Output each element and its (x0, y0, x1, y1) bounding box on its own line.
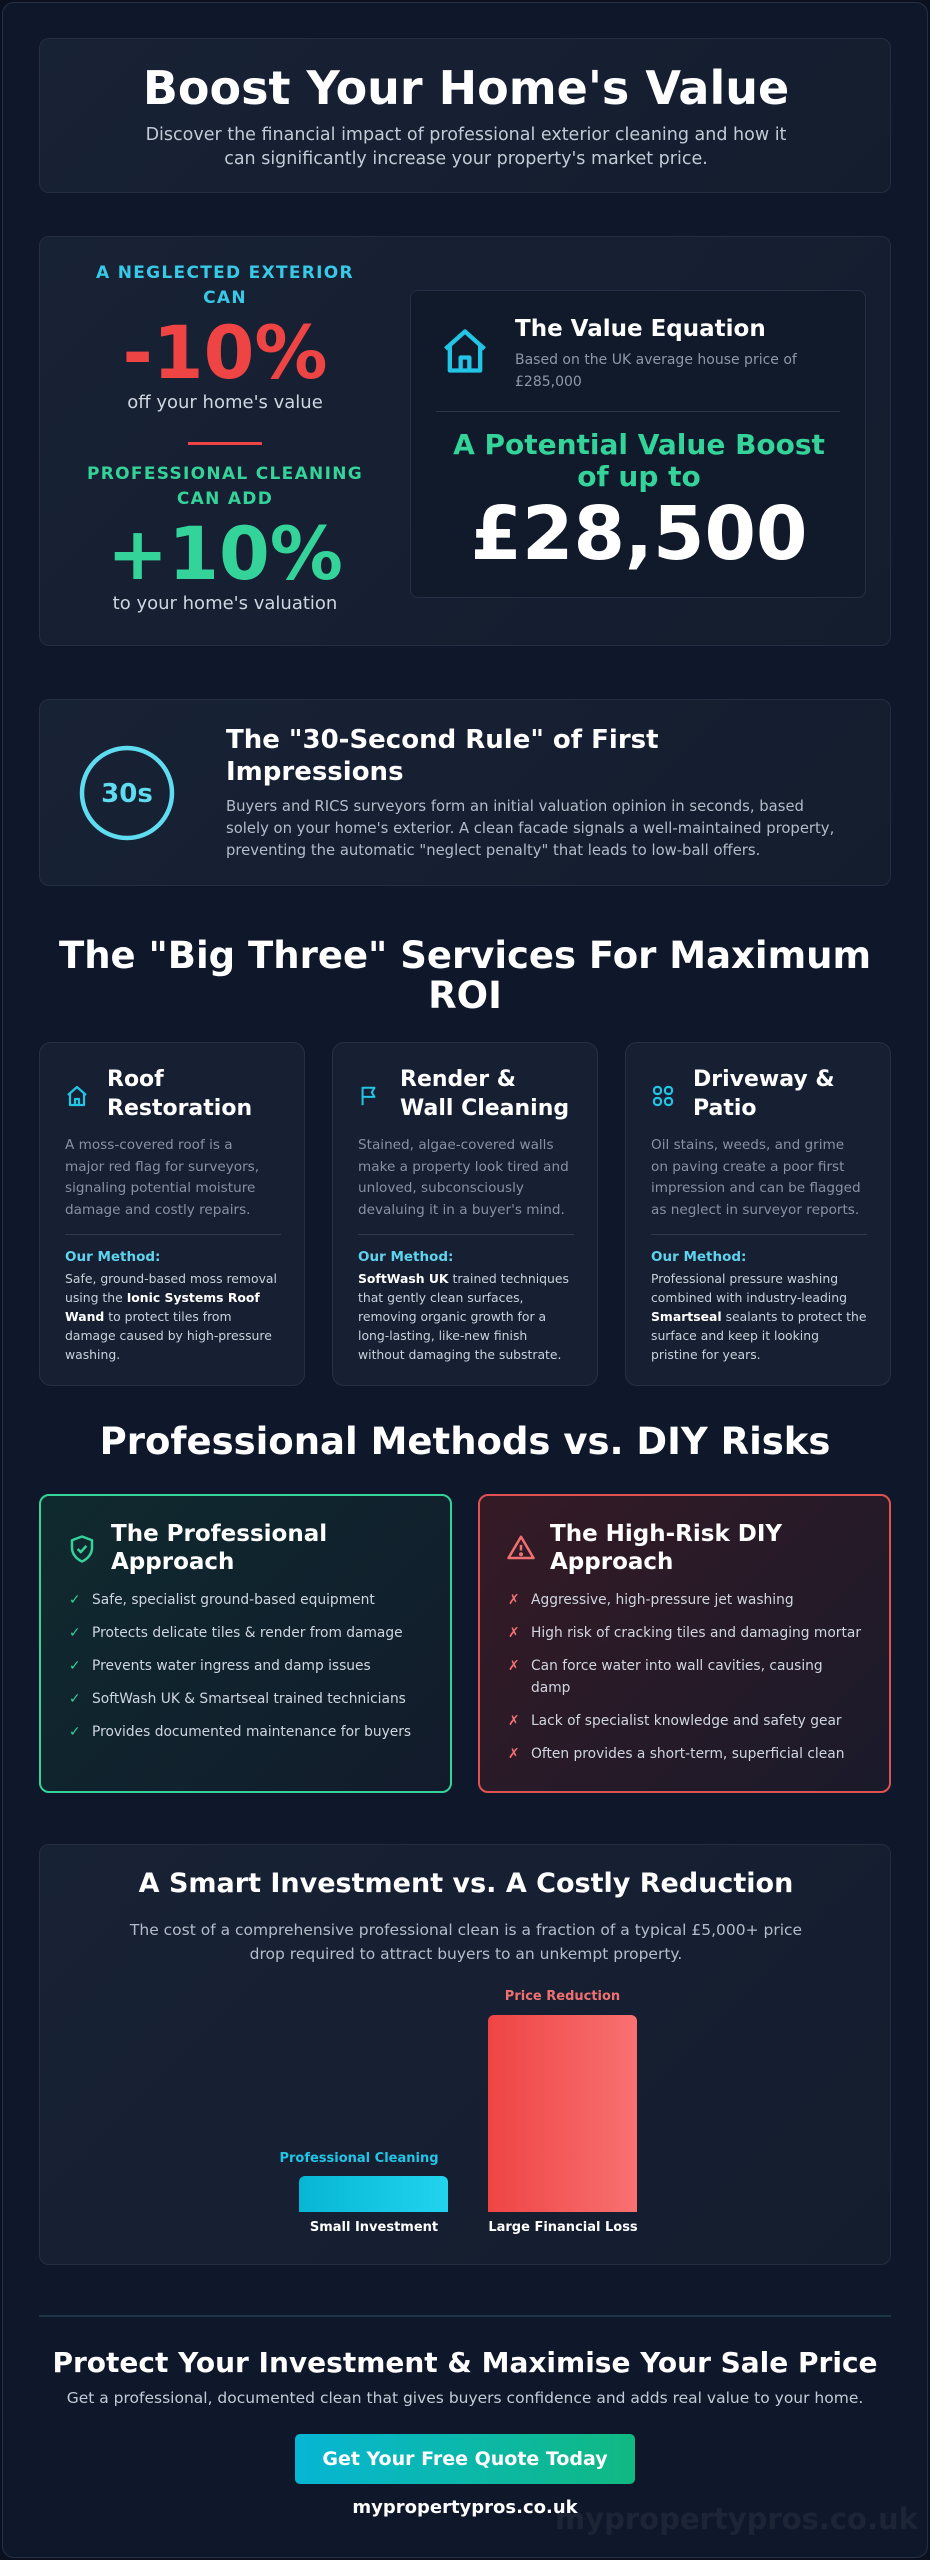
list: pros: Prevents water ingress and damp issues (92, 1658, 371, 1674)
list: risks (508, 1592, 862, 1762)
panel: render & wall: devaluing it in a buyer's mind. (358, 1202, 565, 1218)
heading (111, 1521, 327, 1575)
list: risks: ✗ (508, 1592, 520, 1608)
text: The cost of a comprehensive professional clean is a fraction of a typical £5,000+ price drop required to attract buyers to an unkempt property. (130, 1921, 802, 1963)
number: 28,500: £28,500 (470, 491, 808, 577)
divider red (188, 442, 262, 445)
bar: professional cleaning: Professional Cleaning (279, 2151, 439, 2166)
text: Buyers and RICS surveyors form an initial valuation opinion in seconds, based (226, 798, 804, 815)
stat: neglected (96, 263, 354, 413)
CTA heading: Protect Your Investment & Maximise Your Sale Price (52, 2346, 878, 2379)
watermark: mypropertypros.co.uk (555, 2502, 918, 2536)
text: potential boost: A Potential Value Boost of up to (453, 428, 825, 493)
panel: roof restoration: major red flag for surveyors, (65, 1158, 259, 1174)
panel: driveway & patio: Our Method: (651, 1249, 746, 1265)
list: risks: ✗ (508, 1713, 520, 1729)
icon: flag (362, 1086, 376, 1106)
list: pros: ✓ (69, 1658, 81, 1674)
text (226, 798, 834, 859)
panel: render & wall: long-lasting, like-new finish (358, 1328, 527, 1343)
header card (39, 38, 891, 193)
list: risks: ✗ (508, 1746, 520, 1762)
stat: neglected: A NEGLECTED EXTERIOR CAN (96, 263, 354, 308)
panel: render & wall: that gently clean surfaces, (358, 1290, 523, 1305)
heading: big three: ROI (428, 974, 502, 1017)
stat: neglected: off your home's value (127, 392, 323, 413)
panel: roof restoration: damage and costly repairs. (65, 1202, 250, 1218)
heading: big three: The "Big Three" Services For Maximum (59, 934, 871, 977)
icon: house (444, 329, 486, 373)
bar chart: Large Financial Loss (488, 2220, 638, 2235)
icon: grid (652, 1086, 674, 1106)
heading: big three (59, 934, 871, 1017)
panel: render & wall: Stained, algae-covered walls (358, 1137, 554, 1153)
panel: roof restoration: Safe, ground-based moss removal (65, 1271, 277, 1286)
list: risks: ✗ (508, 1658, 520, 1674)
bar chart: Small Investment (310, 2220, 438, 2235)
panel: driveway & patio: pristine for years. (651, 1347, 761, 1362)
icon: 30s clock: 30s (101, 779, 153, 809)
panel: roof restoration: A moss-covered roof is a (65, 1137, 233, 1153)
panel: roof restoration: damage caused by high-pressure (65, 1328, 272, 1343)
panel: driveway & patio: as neglect in surveyor reports. (651, 1202, 859, 1218)
text: based on: Based on the UK average house price of £285,000 (515, 352, 797, 390)
stat: professional: PROFESSIONAL CLEANING CAN ADD (87, 464, 363, 509)
panel: DIY approach (478, 1494, 891, 1793)
list: pros: ✓ (69, 1625, 81, 1641)
panel: render & wall: Wall Cleaning (400, 1096, 569, 1121)
panel: render & wall: Our Method: (358, 1249, 453, 1265)
panel: roof restoration: Our Method: (65, 1249, 160, 1265)
list: pros: Protects delicate tiles & render from damage (92, 1625, 403, 1641)
subtitle: Discover the financial impact of professional exterior cleaning and how it (146, 125, 786, 145)
heading: The Professional (111, 1521, 327, 1547)
stat: neglected: -10% (122, 311, 328, 396)
panel: render & wall: Render & (400, 1067, 516, 1092)
panel: roof restoration: using the Ionic Systems Roof (65, 1290, 260, 1305)
list: risks: damp (531, 1680, 570, 1696)
icon: house (67, 1086, 87, 1106)
title: Boost Your Home's Value (143, 61, 789, 115)
bar chart (279, 1989, 638, 2235)
text: solely on your home's exterior. A clean facade signals a well-maintained property, (226, 820, 834, 837)
list: risks: ✗ (508, 1625, 520, 1641)
panel: roof restoration: washing. (65, 1347, 120, 1362)
list: pros (69, 1592, 411, 1740)
panel: driveway & patio (625, 1042, 891, 1386)
list: pros: ✓ (69, 1691, 81, 1707)
bar: price reduction: Price Reduction (505, 1989, 620, 2004)
icon: shield (70, 1535, 94, 1563)
list: risks: Can force water into wall cavities, causing (531, 1658, 823, 1674)
panel: render & wall: make a property look tired and (358, 1158, 569, 1174)
panel: render & wall: unloved, subconsciously (358, 1180, 524, 1196)
stat: professional (87, 464, 363, 614)
panel: 30-second rule (39, 699, 891, 886)
heading: methods vs DIY: Professional Methods vs. DIY Risks (100, 1420, 830, 1463)
list: risks: Often provides a short-term, superficial clean (531, 1746, 844, 1762)
panel: driveway & patio: combined with industry-leading (651, 1290, 847, 1305)
panel: value stats (39, 236, 891, 646)
heading: A Smart Investment vs. A Costly Reduction (139, 1868, 793, 1899)
panel: driveway & patio: surface and keep it looking (651, 1328, 819, 1343)
list: pros: ✓ (69, 1724, 81, 1740)
panel: investment chart (39, 1844, 891, 2265)
button (295, 2434, 635, 2484)
panel: driveway & patio: Oil stains, weeds, and grime (651, 1137, 844, 1153)
panel: driveway & patio: Patio (693, 1096, 757, 1121)
text: preventing the automatic "neglect penalty" that leads to low-ball offers. (226, 842, 760, 859)
panel: render & wall: removing organic growth for a (358, 1309, 546, 1324)
heading: 30-second rule: The "30-Second Rule" of First Impressions (226, 725, 659, 787)
heading: Approach (550, 1549, 673, 1575)
CTA text: Get a professional, documented clean that gives buyers confidence and adds real value to your home. (67, 2389, 863, 2407)
stat: professional: to your home's valuation (113, 593, 337, 614)
panel: render & wall: without damaging the substrate. (358, 1347, 561, 1362)
subtitle (146, 125, 786, 169)
list: pros: Safe, specialist ground-based equipment (92, 1592, 375, 1608)
panel: driveway & patio: Professional pressure washing (651, 1271, 838, 1286)
list: pros: ✓ (69, 1592, 81, 1608)
panel: driveway & patio: on paving create a poor first (651, 1158, 844, 1174)
panel: driveway & patio: Driveway & (693, 1067, 835, 1092)
panel: render & wall (332, 1042, 598, 1386)
panel: roof restoration: signaling potential moisture (65, 1180, 255, 1196)
panel: driveway & patio: Smartseal sealants to protect the (651, 1309, 866, 1324)
stat: professional: +10% (107, 512, 343, 597)
panel: roof restoration: Wand to protect tiles from (65, 1309, 232, 1324)
list: pros: SoftWash UK & Smartseal trained technicians (92, 1691, 406, 1707)
panel: roof restoration: Restoration (107, 1096, 252, 1121)
panel: render & wall: SoftWash UK trained techniques (358, 1271, 569, 1286)
button: Get Your Free Quote Today (322, 2448, 608, 2470)
panel: professional approach (39, 1494, 452, 1793)
list: risks: Lack of specialist knowledge and safety gear (531, 1713, 842, 1729)
list: pros: Provides documented maintenance for buyers (92, 1724, 411, 1740)
panel: driveway & patio: impression and can be flagged (651, 1180, 861, 1196)
heading (550, 1521, 782, 1575)
panel: roof restoration (39, 1042, 305, 1386)
list: risks: Aggressive, high-pressure jet washing (531, 1592, 794, 1608)
heading: value equation: The Value Equation (515, 316, 766, 342)
panel: value equation (410, 290, 866, 598)
panel: roof restoration: Roof (107, 1067, 164, 1092)
heading: Approach (111, 1549, 234, 1575)
heading: The High-Risk DIY (550, 1521, 782, 1547)
icon: 30s clock (80, 746, 174, 840)
subtitle: can significantly increase your property's market price. (224, 149, 708, 169)
website: mypropertypros.co.uk (352, 2497, 578, 2518)
icon: warning (507, 1536, 535, 1560)
list: risks: High risk of cracking tiles and damaging mortar (531, 1625, 861, 1641)
